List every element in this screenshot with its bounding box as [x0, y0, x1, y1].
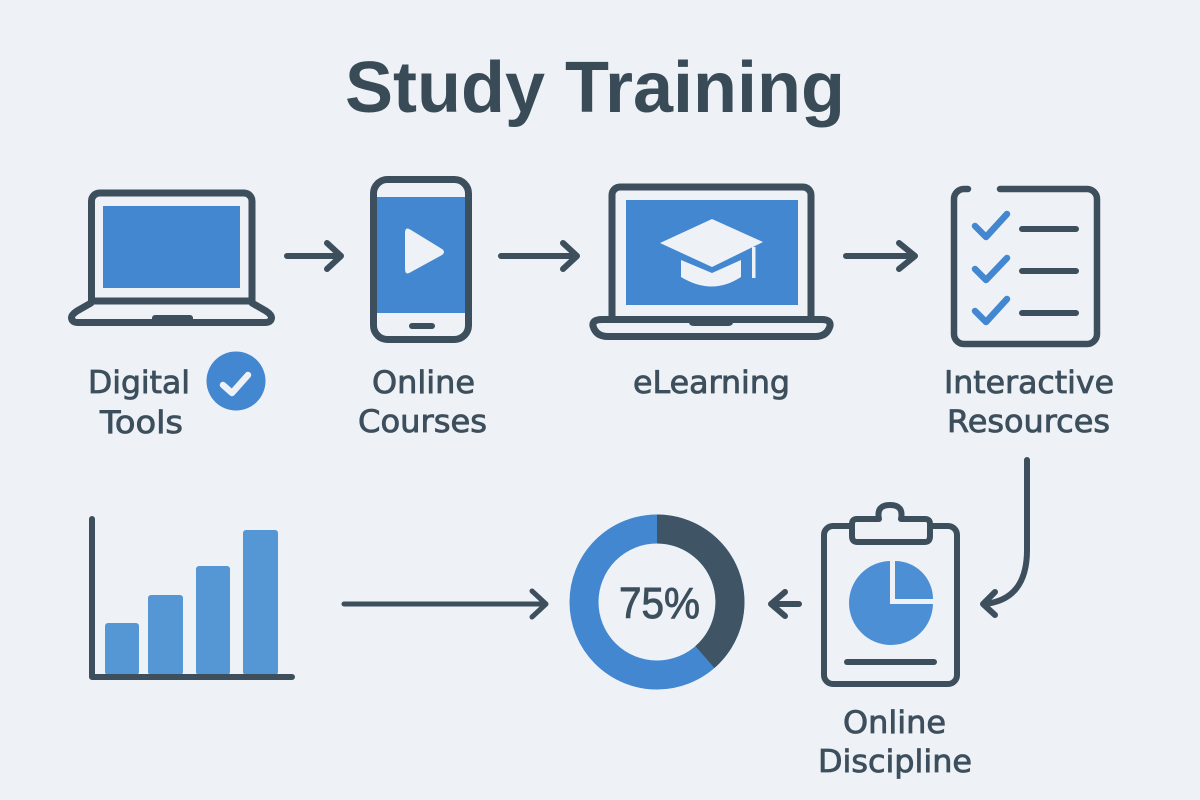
label: digital tools: Digital — [88, 365, 190, 401]
arrow: phone to elearning laptop — [501, 243, 577, 269]
icon: laptop with graduation cap — [593, 187, 830, 336]
label: digital tools: Tools — [99, 405, 183, 441]
label: online courses — [358, 365, 487, 440]
icon: clipboard with pie — [824, 505, 957, 684]
arrow: clipboard to donut — [771, 592, 799, 616]
label: digital tools — [88, 365, 190, 441]
donut chart 75% — [584, 514, 744, 675]
icon: check badge — [206, 352, 266, 410]
label: online discipline: Discipline — [818, 744, 972, 780]
label: online courses: Online — [372, 365, 475, 401]
label: elearning: eLearning — [633, 365, 790, 401]
icon: checklist — [954, 189, 1097, 344]
label: interactive resources: Interactive — [944, 365, 1114, 401]
donut value: 75% — [619, 579, 700, 628]
label: online discipline: Online — [843, 705, 946, 741]
icon: phone with video — [373, 180, 469, 340]
icon: laptop digital tools — [71, 193, 272, 324]
label: interactive resources — [944, 365, 1114, 440]
arrow: elearning to resources — [846, 243, 915, 269]
icon: graduation cap — [660, 219, 763, 286]
label: interactive resources: Resources — [947, 404, 1110, 440]
arrow: bar chart to donut — [344, 591, 546, 617]
arrow: resources curving to clipboard — [983, 460, 1027, 615]
arrow: laptop to phone — [287, 243, 341, 269]
label: online discipline — [818, 705, 972, 780]
bar chart — [92, 519, 292, 677]
title: Study Training — [345, 48, 845, 128]
label: online courses: Courses — [358, 404, 487, 440]
